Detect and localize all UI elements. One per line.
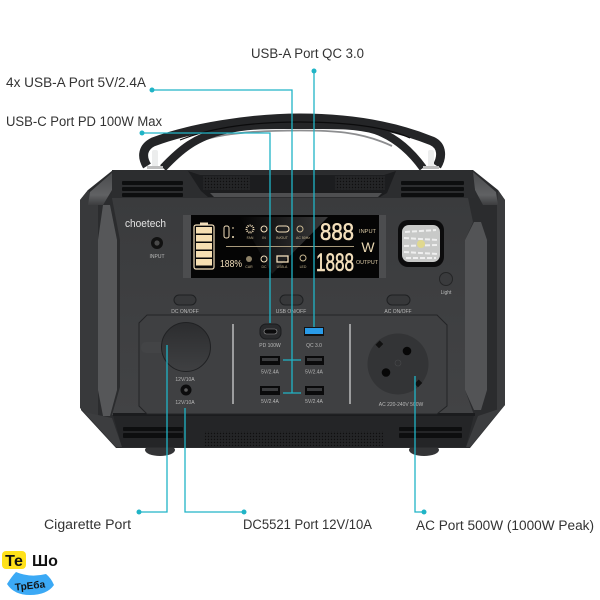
feet [145,444,439,456]
USB-A ports: 5V/2.4A [261,399,280,405]
battery percent: 188% [220,259,242,270]
callout: Cigarette Port [44,345,167,532]
carrying handle [144,118,441,169]
AC socket [368,334,428,408]
output wattage: 1888 [316,249,354,277]
cigarette port [141,322,210,383]
USB switch: USB ON/OFF [276,309,306,315]
status icons row 2 [245,255,307,269]
right outer shell [497,190,505,414]
callout: AC Port [415,376,594,533]
AC socket: AC 220-240V 500W [379,402,424,408]
callout: 4x USB-A Port [6,75,301,393]
status icons row 1: IN [262,236,266,240]
input wattage: 888 [320,219,354,246]
brand logo: choetech [125,218,166,230]
callout: USB-A Port QC 3.0: USB-A Port QC 3.0 [251,46,364,61]
cigarette port: 12V/10A [175,377,195,383]
callout: DC5521 Port [185,408,372,532]
top right shoulder [473,172,498,205]
right side strip [465,222,487,410]
LCD display: OUTPUT [356,260,378,266]
unit and labels: INPUT [359,229,376,235]
QC port: QC 3.0 [306,343,322,349]
light button [440,272,452,296]
DC switch: DC ON/OFF [171,309,199,315]
battery gauge [194,222,214,269]
USB switch [276,295,306,315]
watermark logo: Те [5,553,23,570]
USB-A ports [260,356,324,405]
power station body [80,170,505,448]
LED work light [398,220,444,267]
LCD display [183,215,386,278]
status icons row 2: DC [261,265,267,269]
DC5521 port: 12V/10A [175,400,195,406]
USB-C port [259,324,281,349]
bottom band [113,415,474,447]
USB-A ports: 5V/2.4A [305,370,324,376]
input jack [150,237,164,260]
vent: top left [122,181,183,197]
bottom left shoulder [84,412,122,447]
panel dividers [232,324,351,404]
callout: 4x USB-A Port: 4x USB-A Port 5V/2.4A [6,75,146,90]
callout: USB-C Port [6,114,270,323]
left side strip [98,205,117,416]
AC switch [384,295,412,315]
USB-C port: PD 100W [259,343,281,349]
vent: top right [401,181,464,197]
AC switch: AC ON/OFF [384,309,412,315]
watermark logo [2,551,58,595]
status icons row 2: USB-A [277,265,288,269]
top band [112,170,476,198]
callout: USB-C Port: USB-C Port PD 100W Max [6,114,162,129]
vent: bottom left [123,427,183,438]
bottom right shoulder [466,408,502,447]
DC5521 port [175,384,195,406]
LCD display: W [361,239,375,255]
callout: Cigarette Port: Cigarette Port [44,517,131,532]
input jack: INPUT [150,254,164,260]
light button: Light [441,290,452,296]
status icons row 2: LED [300,265,307,269]
callout: AC Port: AC Port 500W (1000W Peak) [416,518,594,533]
USB-A ports: 5V/2.4A [261,370,280,376]
callout: DC5521 Port: DC5521 Port 12V/10A [243,517,372,532]
display divider [226,246,354,247]
QC port [304,327,324,349]
status icons row 1: AC 50Hz [296,236,310,240]
USB-A ports: 5V/2.4A [305,399,324,405]
callout: USB-A Port QC 3.0 [251,46,364,327]
DC switch [171,295,199,315]
watermark logo: ТрЕба [14,578,46,594]
front panel [112,198,474,415]
port panel [139,315,447,414]
bottom mesh grille [205,431,383,446]
top left shoulder [88,172,113,205]
status icons row 2: CAR [245,265,253,269]
status icons row 1: IN/OUT [276,236,289,240]
status icons row 1 [224,226,310,240]
status icons row 1: FAN [247,236,254,240]
vent: bottom right [399,427,462,438]
left outer shell [80,190,98,416]
watermark logo: Шо [32,553,58,570]
